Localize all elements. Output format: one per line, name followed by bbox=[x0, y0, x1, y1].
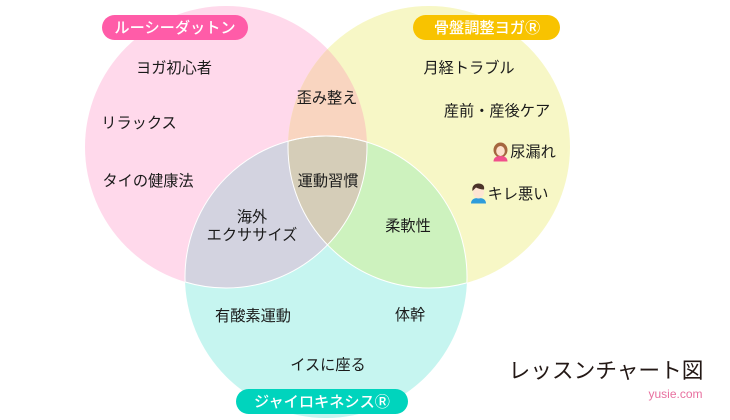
title: レッスンチャート図: レッスンチャート図 bbox=[509, 358, 703, 383]
text: 柔軟性: 柔軟性 bbox=[385, 218, 431, 235]
text: 歪み整え: 歪み整え bbox=[297, 90, 357, 107]
venn circles bbox=[85, 6, 570, 418]
pill: ジャイロキネシス bbox=[236, 389, 408, 414]
circle: ルーシーダットン bbox=[85, 6, 367, 288]
text: 海外エクササイズ: エクササイズ bbox=[207, 227, 297, 244]
pill: 骨盤調整ヨガ bbox=[413, 15, 560, 40]
text: リラックス: リラックス bbox=[101, 115, 177, 132]
text: 有酸素運動: 有酸素運動 bbox=[215, 308, 291, 325]
overlap: yellow and teal bbox=[328, 142, 466, 288]
credit: yusie.com: yusie.com bbox=[648, 387, 703, 401]
text: キレ悪い: キレ悪い bbox=[488, 186, 548, 203]
circle: 骨盤調整ヨガ bbox=[288, 6, 570, 288]
pill: ルーシーダットン: ルーシーダットン bbox=[114, 19, 236, 37]
overlap outlines bbox=[184, 136, 468, 288]
pill: 骨盤調整ヨガ: 骨盤調整ヨガⓇ bbox=[434, 20, 540, 37]
text: 海外エクササイズ bbox=[207, 209, 297, 244]
overlap: all three bbox=[288, 136, 366, 244]
overlap: pink and teal bbox=[186, 142, 327, 288]
text: 運動習慣: 運動習慣 bbox=[298, 172, 358, 190]
pill: ジャイロキネシス: ジャイロキネシスⓇ bbox=[254, 394, 390, 411]
text: タイの健康法: タイの健康法 bbox=[102, 173, 194, 190]
icon: man bbox=[471, 184, 486, 204]
overlap: pink and yellow bbox=[288, 50, 367, 142]
circle: ジャイロキネシス bbox=[185, 136, 467, 418]
text: 月経トラブル: 月経トラブル bbox=[423, 59, 515, 77]
text: ヨガ初心者: ヨガ初心者 bbox=[136, 60, 212, 77]
text: 尿漏れ: 尿漏れ bbox=[510, 144, 556, 161]
text: 海外エクササイズ: 海外 bbox=[237, 209, 267, 226]
text: 産前・産後ケア: 産前・産後ケア bbox=[444, 103, 550, 120]
text: イスに座る: イスに座る bbox=[290, 357, 366, 374]
icon: woman bbox=[494, 142, 508, 162]
text: 体幹: 体幹 bbox=[395, 307, 425, 324]
pill: ルーシーダットン bbox=[102, 15, 248, 40]
